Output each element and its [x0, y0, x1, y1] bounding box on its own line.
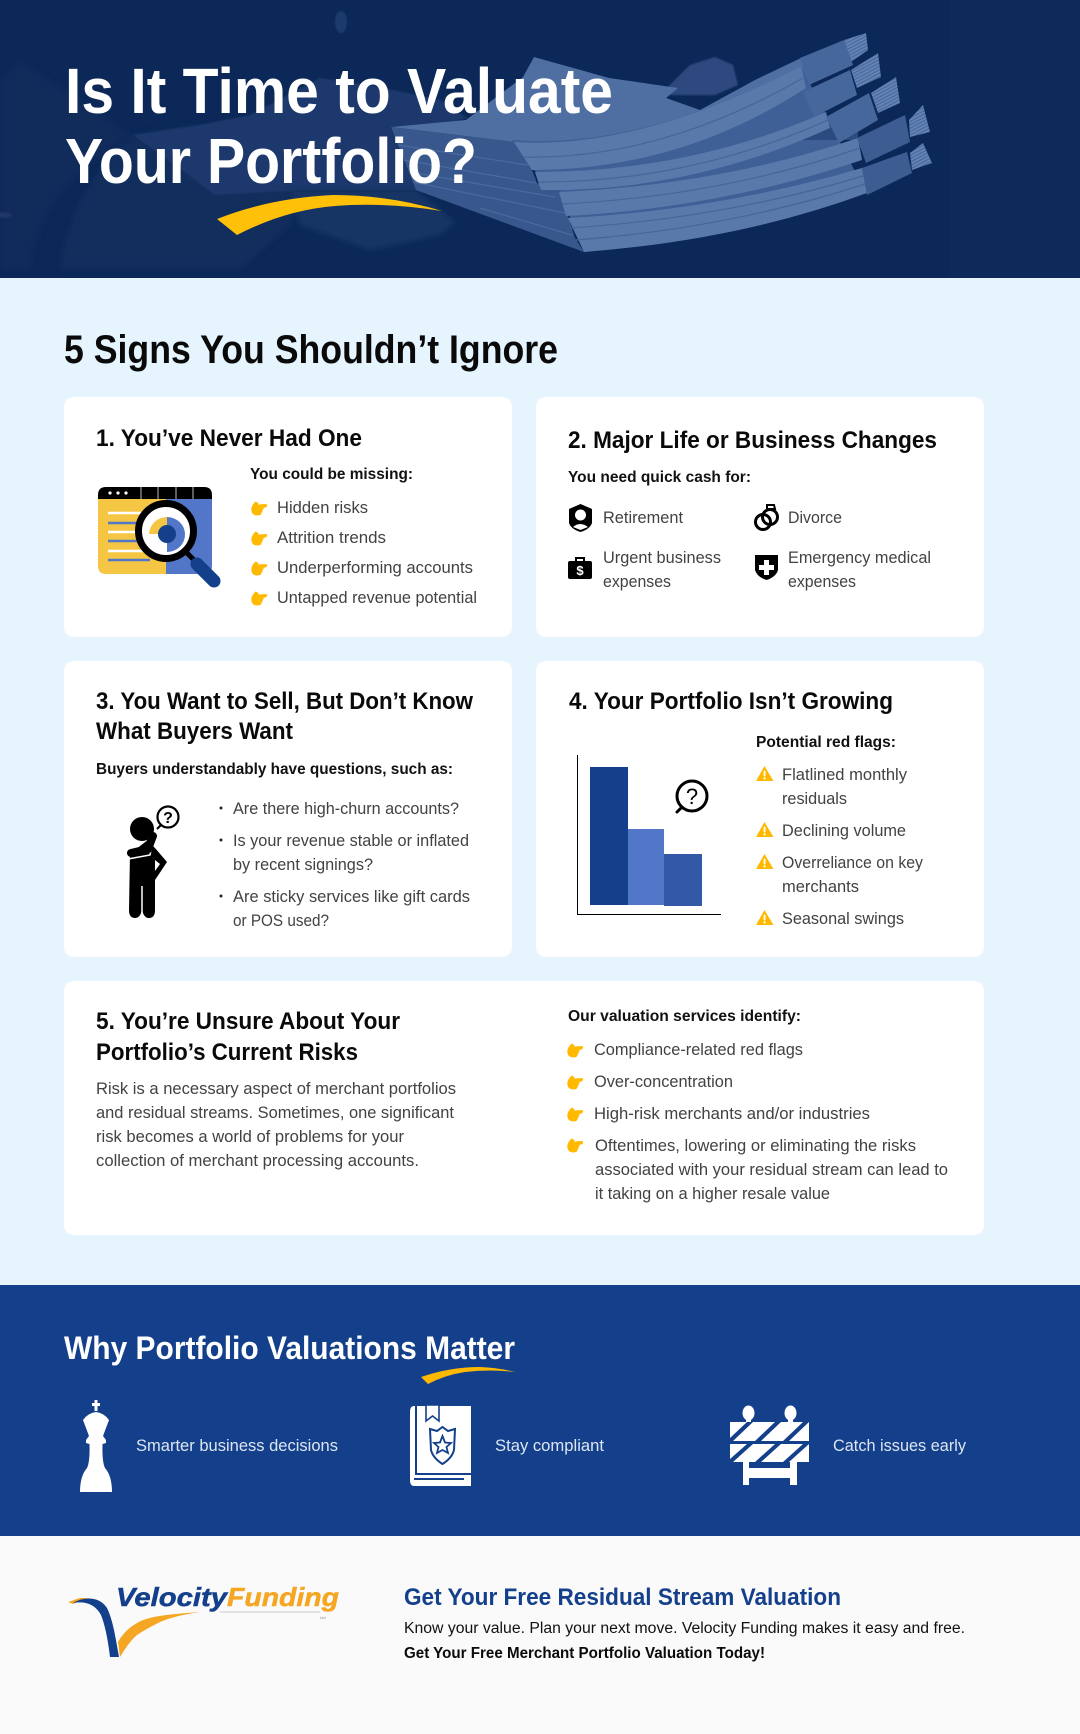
- card 1 list: Untapped revenue potential: [277, 589, 477, 607]
- text: urgent business expenses: [603, 549, 721, 591]
- icon: chess king: [80, 1400, 112, 1492]
- text: urgent business expenses: Urgent business: [603, 549, 721, 567]
- panel: card 2: [536, 397, 984, 637]
- card 3 bullet list: Are there high-churn accounts?: [233, 800, 459, 818]
- card 3 bullet list: or POS used?: [233, 912, 329, 930]
- card 2 heading: 2. Major Life or Business Changes: [568, 427, 937, 454]
- card 5 list: High-risk merchants and/or industries: [594, 1105, 870, 1123]
- panel: card 1: [64, 397, 512, 637]
- icon: thinking person: ?: [163, 810, 173, 827]
- text: urgent business expenses: expenses: [603, 573, 671, 591]
- title swoosh: [217, 195, 442, 235]
- card 5 heading: [96, 1008, 400, 1066]
- card 3 bullet list: [220, 800, 470, 930]
- text: divorce: Divorce: [788, 509, 842, 527]
- panel: card 4: [536, 661, 984, 957]
- logo: Velocity Funding: Funding: [227, 1582, 339, 1612]
- title: Is It Time to Valuate: [65, 55, 613, 127]
- card 3 heading: 3. You Want to Sell, But Don’t Know: [96, 688, 473, 715]
- card 5 list: Over-concentration: [594, 1073, 733, 1091]
- card 1 heading: 1. You’ve Never Had One: [96, 425, 362, 452]
- call to action heading: Get Your Free Residual Stream Valuation: [404, 1584, 841, 1611]
- card 1 list: Underperforming accounts: [277, 559, 473, 577]
- panel: footer: [0, 1536, 1080, 1734]
- card 3 subheading: Buyers understandably have questions, such as:: [96, 761, 453, 778]
- card 1 list: [250, 466, 477, 607]
- card 3 bullet list: by recent signings?: [233, 856, 373, 874]
- card 4 list: Flatlined monthly: [782, 766, 908, 784]
- header banner: [0, 0, 1080, 278]
- bar chart: declining bars: [578, 755, 721, 914]
- panel: card 5: [64, 981, 984, 1235]
- card 4 list: Overreliance on key: [782, 854, 924, 872]
- card 5 heading: Portfolio’s Current Risks: [96, 1039, 358, 1066]
- call to action text: [404, 1620, 965, 1662]
- card 4 list: Declining volume: [782, 822, 906, 840]
- text: emergency medical expenses: [788, 549, 931, 591]
- card 5 paragraph: collection of merchant processing accounts.: [96, 1152, 419, 1170]
- panel: card 3: [64, 661, 512, 957]
- logo: Velocity Funding: [68, 1582, 339, 1657]
- icon: compliance book: [410, 1405, 471, 1486]
- card 2 subheading: You need quick cash for:: [568, 469, 751, 486]
- card 4 list: residuals: [782, 790, 847, 808]
- text: catch issues: Catch issues early: [833, 1437, 967, 1455]
- card 5 paragraph: and residual streams. Sometimes, one significant: [96, 1104, 454, 1122]
- card 5 list: associated with your residual stream can lead to: [595, 1161, 948, 1179]
- card 4 list: Potential red flags:: [756, 734, 896, 751]
- card 5 list: it taking on a higher resale value: [595, 1185, 830, 1203]
- text: stay compliant: Stay compliant: [495, 1437, 604, 1455]
- card 5 list: Our valuation services identify:: [568, 1008, 801, 1025]
- title: [66, 66, 611, 184]
- icon: thinking person: [128, 806, 178, 918]
- photo: hand holding stack of papers: [0, 33, 932, 270]
- section heading: 5 Signs You Shouldn’t Ignore: [64, 328, 558, 372]
- icon: retirement shield: [569, 504, 592, 532]
- card 4 heading: 4. Your Portfolio Isn’t Growing: [569, 688, 893, 715]
- icon: rings: [756, 505, 778, 530]
- icon: money briefcase: [568, 558, 592, 579]
- title: Your Portfolio?: [65, 125, 477, 197]
- heading swoosh: [421, 1367, 515, 1384]
- logo: Velocity Funding: Velocity: [116, 1582, 229, 1612]
- card 4 list: [756, 734, 924, 928]
- card 5 paragraph: [96, 1080, 456, 1170]
- card 1 list: Attrition trends: [277, 529, 386, 547]
- text: emergency medical expenses: Emergency medical: [788, 549, 931, 567]
- card 5 list: Oftentimes, lowering or eliminating the risks: [595, 1137, 916, 1155]
- card 3 bullet list: Are sticky services like gift cards: [233, 888, 470, 906]
- card 3 bullet list: Is your revenue stable or inflated: [233, 832, 469, 850]
- icon: medical shield: [755, 555, 778, 580]
- text: retirement: Retirement: [603, 509, 683, 527]
- card 4 list: Seasonal swings: [782, 910, 904, 928]
- card 5 list: [567, 1008, 948, 1203]
- text: emergency medical expenses: expenses: [788, 573, 856, 591]
- card 1 list: Hidden risks: [277, 499, 368, 517]
- logo: Velocity Funding: Ltd: [320, 1615, 326, 1620]
- card 3 heading: What Buyers Want: [96, 718, 293, 745]
- card 1 list: You could be missing:: [250, 466, 413, 483]
- icon: road barrier: [730, 1406, 809, 1485]
- card 5 paragraph: risk becomes a world of problems for your: [96, 1128, 405, 1146]
- icon: window with magnifier: [98, 487, 214, 581]
- card 5 list: Compliance-related red flags: [594, 1041, 803, 1059]
- panel: why valuations matter: [0, 1285, 1080, 1536]
- card 5 heading: 5. You’re Unsure About Your: [96, 1008, 400, 1035]
- call to action text: Get Your Free Merchant Portfolio Valuation Today!: [404, 1645, 765, 1662]
- card 3 heading: [96, 688, 473, 745]
- card 4 list: merchants: [782, 878, 859, 896]
- text: smarter decisions: Smarter business decisions: [136, 1437, 338, 1455]
- icon: money briefcase: $: [576, 563, 584, 578]
- card 5 paragraph: Risk is a necessary aspect of merchant portfolios: [96, 1080, 456, 1098]
- section heading: Why Portfolio Valuations Matter: [64, 1330, 515, 1366]
- call to action text: Know your value. Plan your next move. Velocity Funding makes it easy and free.: [404, 1620, 965, 1637]
- bar chart: declining bars: ?: [686, 784, 698, 809]
